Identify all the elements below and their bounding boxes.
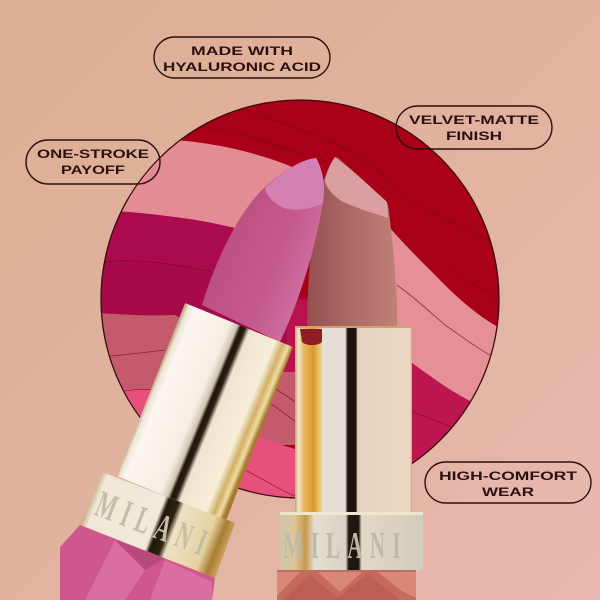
center magenta sliver: [285, 300, 308, 372]
right lipstick collar: [280, 512, 423, 571]
label: made with hyaluronic acid: [154, 37, 330, 78]
left dusty rose band: [102, 313, 180, 390]
left lipstick tube: [117, 303, 293, 521]
right lipstick collar: MILANI: [283, 525, 401, 567]
label: one-stroke payoff: ONE-STROKE: [37, 147, 149, 161]
right lipstick tube: [295, 326, 412, 514]
label: high-comfort wear: WEAR: [482, 485, 534, 499]
left deep magenta band: [102, 296, 308, 372]
label: one-stroke payoff: [26, 140, 160, 184]
left hot pink band: [124, 389, 151, 417]
right pink band: [390, 228, 496, 401]
left lipstick bullet: [202, 158, 324, 342]
left magenta band: [105, 211, 234, 272]
bottom hot pink band: [239, 438, 295, 498]
label: velvet-matte finish: FINISH: [446, 129, 502, 143]
right lipstick faceted base: [277, 570, 416, 600]
left lipstick: [60, 158, 324, 600]
label: high-comfort wear: HIGH-COMFORT: [439, 469, 578, 483]
right lipstick: [277, 157, 423, 600]
label: one-stroke payoff: PAYOFF: [61, 163, 125, 177]
center dusty band: [258, 372, 295, 445]
lipstick swatch circle: [100, 100, 500, 500]
left light pink band: [122, 140, 292, 228]
label: made with hyaluronic acid: MADE WITH: [191, 44, 293, 58]
left lipstick collar: MILANI: [90, 483, 213, 564]
left lipstick faceted base: [60, 520, 220, 600]
swatch crease lines: [100, 108, 498, 496]
label: high-comfort wear: [425, 462, 591, 503]
right magenta band: [412, 363, 470, 463]
label: velvet-matte finish: [396, 106, 552, 149]
label: velvet-matte finish: VELVET-MATTE: [409, 113, 539, 127]
red gem: [300, 329, 322, 345]
label: made with hyaluronic acid: HYALURONIC ACID: [163, 60, 321, 74]
left lipstick collar: [80, 472, 235, 578]
right lipstick bullet: [307, 157, 397, 330]
